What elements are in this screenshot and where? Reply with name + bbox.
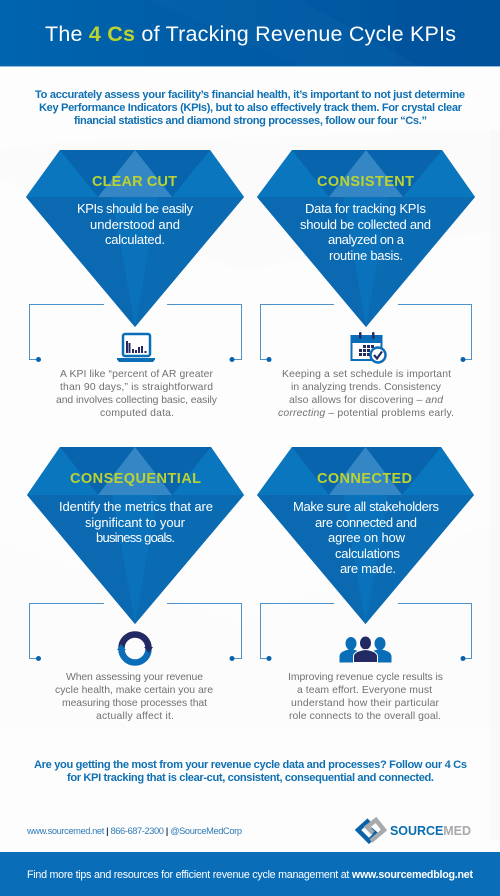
intro text: To accurately assess your facility’s financial health, it’s important to not just determine: [35, 89, 465, 101]
footer text: Find more tips and resources for efficient revenue cycle management at www.sourcemedblog.net: [27, 869, 473, 881]
diamond: consistent: [257, 150, 475, 327]
description: connected: Make sure all stakeholders: [293, 499, 440, 514]
description: consistent: routine basis.: [329, 248, 403, 263]
detail text: connected: role connects to the overall goal.: [289, 711, 441, 722]
description: connected: calculations: [335, 546, 400, 561]
detail text: consistent: [278, 369, 454, 419]
panel: consequential: [27, 447, 244, 722]
logo mark: [358, 820, 384, 841]
icon: laptop chart: [117, 334, 155, 362]
detail text: consistent: correcting – potential problems early.: [278, 408, 454, 419]
description: connected: are connected and: [315, 515, 417, 530]
contact line: www.sourcemed.net | 866-687-2300 | @SourceMedCorp: [26, 826, 242, 836]
detail text: clear cut: [56, 369, 218, 419]
closing text: [34, 759, 467, 784]
closing text: Are you getting the most from your revenue cycle data and processes? Follow our 4 Cs: [34, 759, 467, 771]
connector: right: [398, 304, 472, 362]
connector: left: [30, 304, 104, 362]
detail text: consequential: When assessing your revenue: [66, 672, 203, 683]
icon: team of people: [340, 636, 392, 662]
heading: clear cut: CLEAR CUT: [92, 174, 177, 190]
diamond: consequential: [27, 447, 244, 624]
description: consequential: Identify the metrics that are: [59, 499, 213, 514]
panel: clear cut: [26, 150, 244, 419]
description: connected: are made.: [340, 561, 396, 576]
description: consistent: analyzed on a: [328, 232, 405, 247]
icon: cycle arrows: [117, 634, 153, 662]
description: clear cut: [77, 201, 194, 247]
heading: consequential: CONSEQUENTIAL: [70, 471, 201, 487]
intro text: Key Performance Indicators (KPIs), but to also effectively track them. For crystal clear: [39, 102, 463, 114]
detail text: consequential: [55, 672, 213, 722]
description: connected: agree on how: [328, 530, 406, 545]
logo: sourcemed: [358, 820, 471, 841]
description: consequential: significant to your: [85, 515, 186, 530]
detail text: clear cut: computed data.: [100, 408, 174, 419]
detail text: connected: a team effort. Everyone must: [297, 685, 432, 696]
description: clear cut: understood and: [90, 217, 180, 232]
connector: right: [167, 604, 242, 661]
detail text: consequential: measuring those processes that: [62, 698, 207, 709]
detail text: consistent: in analyzing trends. Consistency: [291, 382, 442, 393]
closing text: for KPI tracking that is clear-cut, consistent, consequential and connected.: [67, 772, 434, 784]
description: consistent: Data for tracking KPIs: [305, 201, 426, 216]
description: consequential: business goals.: [96, 530, 175, 545]
diamond: connected: [257, 447, 474, 624]
intro text: financial statistics and diamond strong processes, follow our four “Cs.”: [74, 115, 427, 127]
connector: left: [260, 304, 334, 362]
description: clear cut: calculated.: [105, 232, 165, 247]
diamond: clear cut: [26, 150, 244, 327]
detail text: clear cut: and involves collecting basic, easily: [56, 395, 218, 406]
icon: calendar check: [351, 332, 386, 362]
detail text: connected: Improving revenue cycle results is: [288, 672, 443, 683]
logo wordmark: SOURCEMED: [390, 824, 471, 838]
connector: right: [398, 604, 472, 661]
panel: consistent: [257, 150, 475, 419]
intro text: [35, 89, 465, 127]
title: The 4 Cs of Tracking Revenue Cycle KPIs: [45, 22, 456, 46]
description: consistent: should be collected and: [300, 217, 431, 232]
description: connected: [293, 499, 440, 576]
heading: connected: CONNECTED: [317, 471, 412, 487]
detail text: clear cut: A KPI like “percent of AR greater: [60, 369, 214, 380]
description: clear cut: KPIs should be easily: [77, 201, 194, 216]
connector: left: [30, 604, 104, 661]
header band: [0, 0, 500, 67]
detail text: consistent: Keeping a set schedule is important: [282, 369, 451, 380]
description: consistent: [300, 201, 431, 263]
description: consequential: [59, 499, 213, 545]
heading: consistent: CONSISTENT: [317, 174, 414, 190]
panel: connected: [257, 447, 474, 722]
footer band: [0, 852, 500, 896]
detail text: consequential: actually affect it.: [96, 711, 174, 722]
connector: left: [260, 604, 334, 661]
detail text: consequential: cycle health, make certain you are: [55, 685, 213, 696]
detail text: connected: understand how their particular: [291, 698, 440, 709]
detail text: consistent: also allows for discovering – and: [289, 395, 444, 406]
connector: right: [167, 304, 242, 362]
detail text: clear cut: than 90 days,” is straightforward: [60, 382, 213, 393]
detail text: connected: [288, 672, 443, 722]
